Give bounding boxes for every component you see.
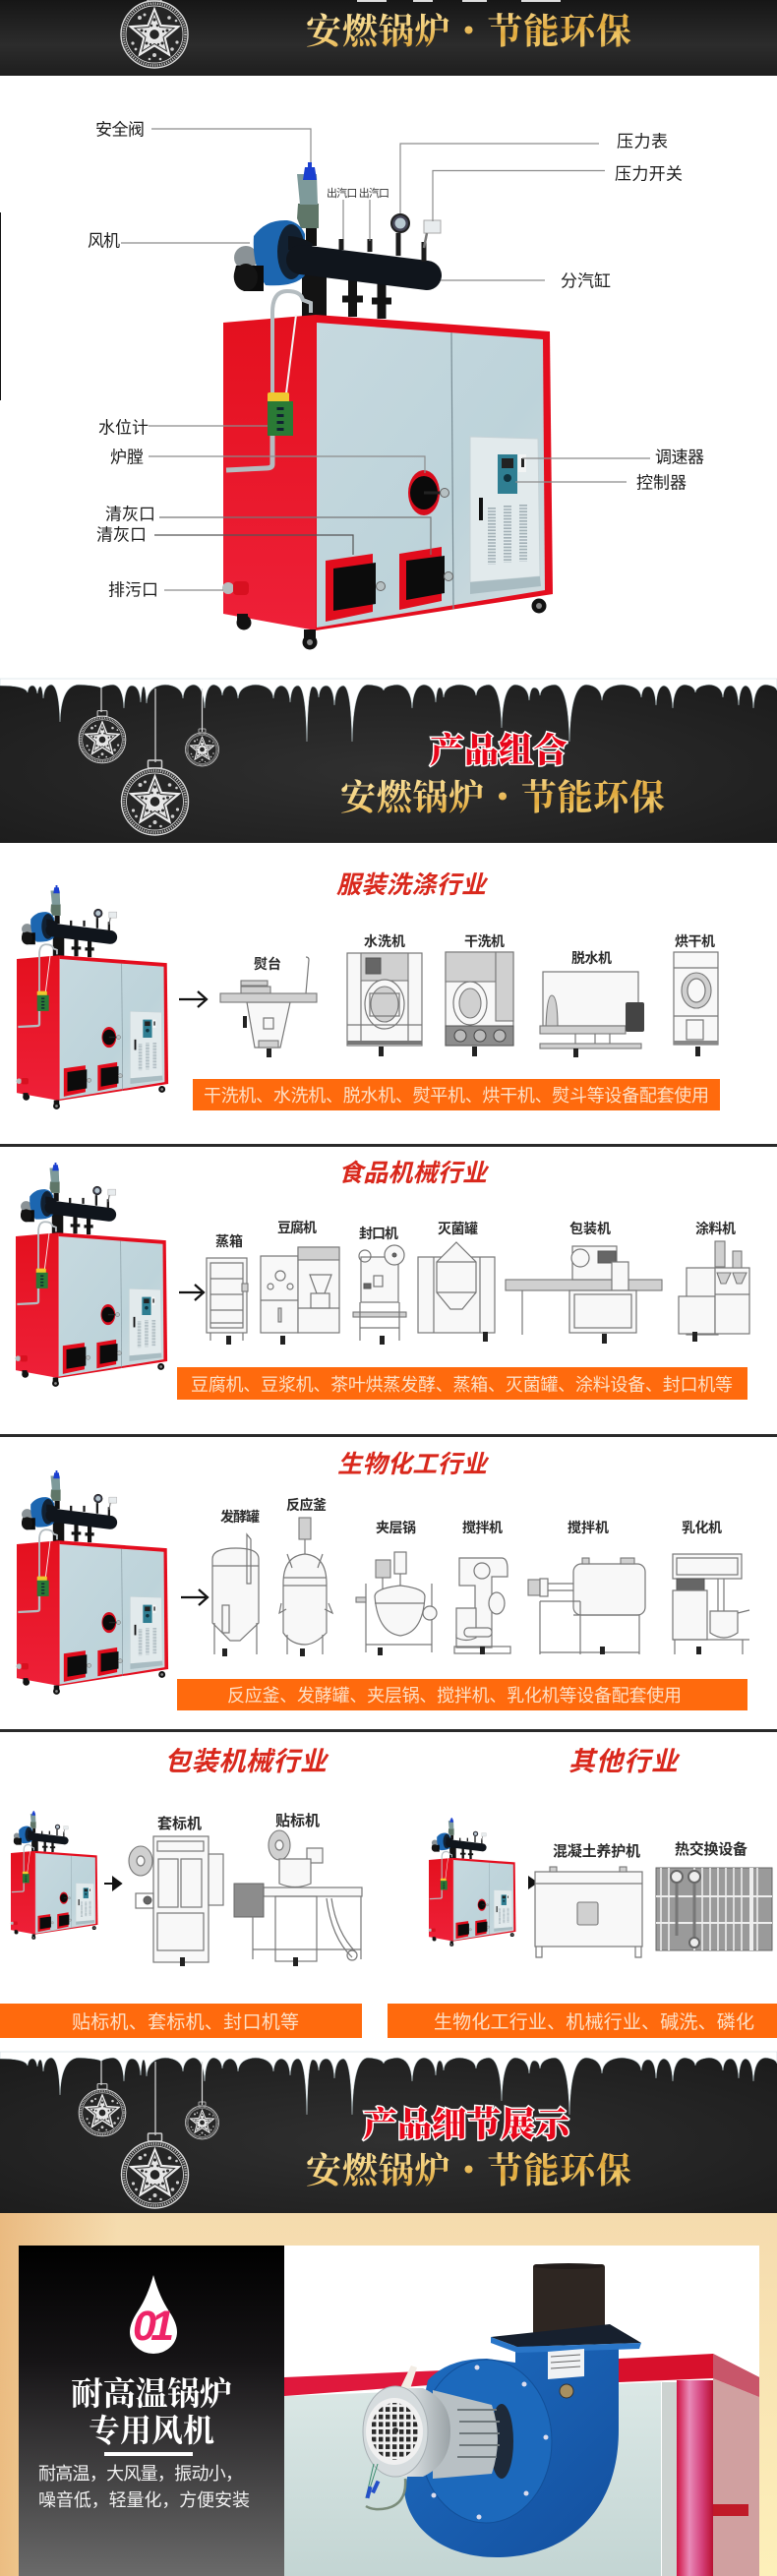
machine: ironing table (220, 956, 317, 1057)
machine: labeler: 贴标机 (275, 1813, 320, 1829)
machine: washer: 水洗机 (364, 933, 405, 949)
icon: star ornament (121, 0, 188, 68)
machine: reactor: 反应釜 (286, 1497, 327, 1513)
photo: blower fan (284, 2246, 759, 2576)
ornaments (79, 2062, 218, 2208)
machine: coating machine: 涂料机 (695, 1221, 736, 1236)
icicles (0, 2052, 777, 2115)
orange band (0, 2004, 362, 2038)
machine: sleeve labeler (129, 1816, 223, 1966)
callout labels: boiler parts: 排污口 (108, 580, 158, 600)
heading: gold slogan: 安燃锅炉・节能环保 (340, 778, 665, 817)
machine: horizontal mixer: 搅拌机 (568, 1520, 609, 1535)
callout labels: boiler parts: 风机 (88, 232, 120, 250)
banner: product combination (0, 679, 777, 843)
banner: product details (0, 2052, 777, 2213)
machine: concrete curing (535, 1842, 642, 1957)
machine: steam box (207, 1233, 248, 1345)
section: garment laundry (17, 871, 720, 1110)
ornaments (79, 689, 218, 835)
machine: ironing table: 熨台 (254, 956, 281, 972)
heading: gold slogan: 安燃锅炉・节能环保 (306, 2151, 631, 2190)
heading: red title: 产品组合 (430, 732, 568, 770)
orange band (177, 1367, 747, 1400)
orange band: 反应釜、发酵罐、夹层锅、搅拌机、乳化机等设备配套使用 (227, 1686, 682, 1706)
callout labels: boiler parts: 出汽口 出汽口 (327, 186, 389, 200)
machine: heat exchanger (656, 1840, 772, 1950)
callout labels: boiler parts: 清灰口 (105, 506, 155, 523)
callout labels: boiler parts: 炉膛 (110, 449, 144, 466)
boiler thumbnail (429, 1818, 515, 1947)
orange band: 豆腐机、豆浆机、茶叶烘蒸发酵、蒸箱、灭菌罐、涂料设备、封口机等 (191, 1375, 733, 1395)
heading: 耐高温锅炉 (71, 2376, 232, 2413)
boiler thumbnail (11, 1811, 97, 1940)
orange band: 生物化工行业、机械行业、碱洗、磷化 (434, 2011, 754, 2033)
machine: heat exchanger: 热交换设备 (675, 1840, 747, 1858)
machine: sleeve labeler: 套标机 (157, 1816, 202, 1832)
machine: sealing machine: 封口机 (359, 1226, 398, 1241)
banner: top header (0, 0, 777, 76)
arrow (528, 1876, 538, 1889)
machine: reactor (279, 1497, 332, 1656)
callout labels: boiler parts (88, 120, 704, 600)
callout labels: boiler parts: 控制器 (636, 474, 687, 492)
callout labels: boiler parts: 调速器 (655, 449, 704, 466)
machine: packaging machine: 包装机 (569, 1221, 611, 1236)
machine: packaging machine (506, 1221, 662, 1344)
machine: sterilizing tank: 灭菌罐 (438, 1221, 478, 1236)
machine: tumble dryer: 烘干机 (675, 933, 715, 949)
machine: emulsifier (673, 1520, 749, 1654)
title: 服装洗涤行业 (336, 871, 489, 899)
machine: tofu machine (261, 1220, 339, 1345)
machine: sterilizing tank (418, 1221, 495, 1342)
heading: 专用风机 (89, 2413, 214, 2448)
icon: number drop: 01 (133, 2303, 174, 2350)
machine: washer (347, 933, 422, 1056)
panel: text column (19, 2246, 284, 2576)
heading (71, 2376, 232, 2448)
callout lines: boiler parts (121, 129, 650, 590)
orange band: 贴标机、套标机、封口机等 (72, 2011, 299, 2033)
callout labels: boiler parts: 安全阀 (95, 120, 145, 140)
machine: fermenter: 发酵罐 (220, 1509, 260, 1525)
machine: jacketed pot: 夹层锅 (376, 1520, 416, 1535)
arrow (104, 1878, 121, 1889)
machine: mixer (454, 1520, 510, 1654)
title: 包装机械行业 (164, 1747, 329, 1776)
title: 食品机械行业 (338, 1160, 490, 1187)
heading: gold slogan: 安燃锅炉・节能环保 (306, 12, 631, 51)
arrow (181, 1589, 208, 1605)
machine: coating machine (679, 1221, 749, 1342)
body text (38, 2464, 250, 2510)
machine: emulsifier: 乳化机 (682, 1520, 722, 1535)
boiler thumbnail (17, 885, 168, 1109)
machine: steam box: 蒸箱 (215, 1233, 243, 1249)
left edge rule (0, 212, 1, 400)
machine: sealing machine (353, 1226, 406, 1345)
orange band (177, 1679, 747, 1710)
section: other industries (388, 1747, 777, 2038)
diagram: main boiler (222, 162, 553, 649)
icicles (0, 679, 777, 742)
machine: tumble dryer (674, 933, 718, 1056)
orange band (388, 2004, 777, 2038)
heading: red title: 产品细节展示 (363, 2105, 573, 2144)
callout labels: boiler parts: 清灰口 (96, 525, 147, 545)
boiler thumbnail (17, 1470, 168, 1695)
machine: labeler (234, 1813, 362, 1966)
icon: number drop (130, 2275, 177, 2354)
title: 生物化工行业 (337, 1451, 490, 1478)
panel: detail 01 (0, 2213, 777, 2576)
body text: 噪音低，轻量化，方便安装 (38, 2490, 250, 2510)
title: 其他行业 (568, 1747, 681, 1776)
callout labels: boiler parts: 压力开关 (615, 165, 683, 183)
section: food machinery (16, 1160, 749, 1400)
machine: dry cleaner (446, 933, 513, 1056)
boiler thumbnail (16, 1163, 167, 1387)
callout labels: boiler parts: 压力表 (617, 132, 668, 151)
machine: spin dryer (540, 950, 644, 1057)
machine: spin dryer: 脱水机 (571, 950, 612, 966)
arrow (179, 991, 207, 1007)
callout labels: boiler parts: 水位计 (98, 419, 149, 437)
machine: horizontal mixer (528, 1520, 645, 1654)
orange band (193, 1079, 720, 1110)
machine: fermenter (212, 1509, 260, 1656)
section: biochemical (17, 1451, 749, 1710)
section: packaging machinery (0, 1747, 362, 2038)
machine: tofu machine: 豆腐机 (277, 1220, 317, 1235)
arrow (179, 1285, 204, 1300)
body text: 耐高温，大风量，振动小， (38, 2464, 243, 2484)
machine: jacketed pot (356, 1520, 437, 1655)
callout labels: boiler parts: 分汽缸 (561, 271, 611, 291)
machine: dry cleaner: 干洗机 (464, 933, 505, 949)
machine: concrete curing: 混凝土养护机 (553, 1842, 640, 1860)
orange band: 干洗机、水洗机、脱水机、熨平机、烘干机、熨斗等设备配套使用 (204, 1086, 709, 1106)
machine: mixer: 搅拌机 (462, 1520, 503, 1535)
